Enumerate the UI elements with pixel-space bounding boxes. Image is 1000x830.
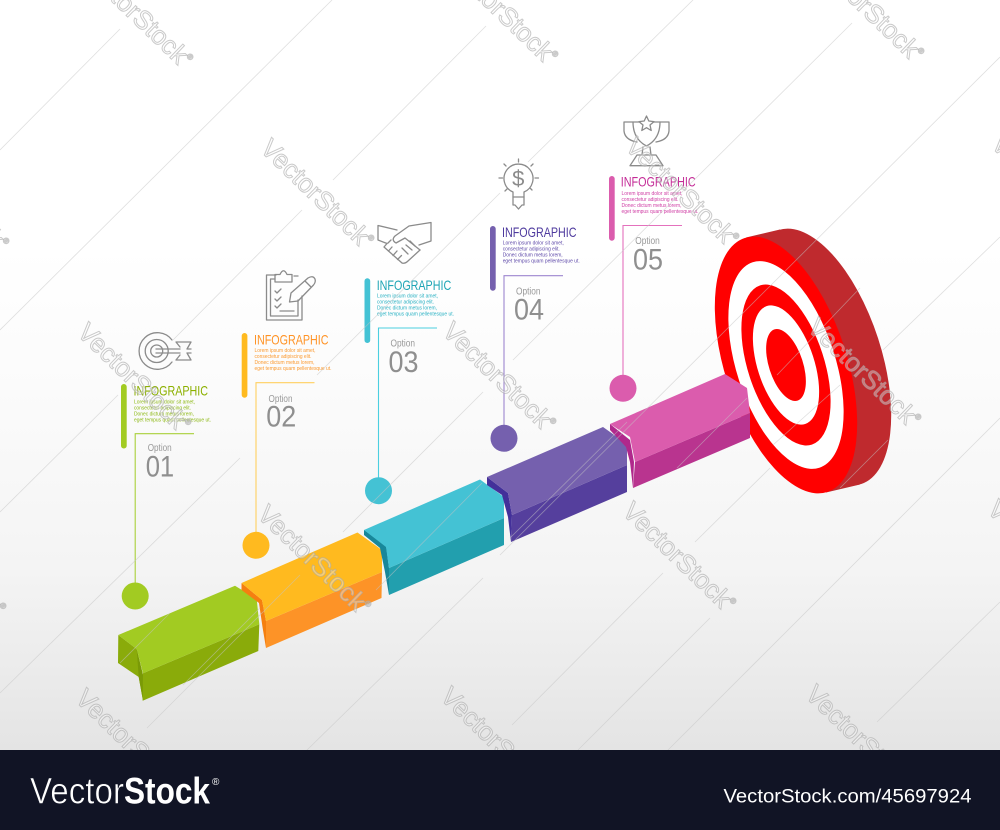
connector (135, 434, 194, 590)
heading: INFOGRAPHIC (502, 224, 576, 240)
number: 04 (514, 294, 544, 326)
text: ® (913, 412, 923, 422)
text: ® (183, 417, 193, 427)
heading: INFOGRAPHIC (377, 277, 451, 293)
icon: handshake (378, 222, 431, 263)
text: VectorStock (437, 316, 557, 434)
label: Option (268, 394, 292, 405)
label: Option (516, 286, 540, 298)
body text: Donec dictum metus lorem, (503, 252, 563, 258)
body text (377, 294, 454, 318)
footer logo: Vector (30, 770, 124, 812)
text: ® (916, 46, 926, 56)
body text: eget tempus quam pellentesque ut. (134, 417, 211, 423)
label: Option (148, 443, 172, 454)
connector (378, 328, 437, 485)
icon: trophy (624, 116, 669, 166)
footer url: VectorStock.com/45697924 (724, 787, 972, 808)
label: Option (635, 236, 660, 247)
connector (256, 383, 314, 540)
node (365, 477, 392, 504)
body text: consectetur adipiscing elit. (377, 300, 434, 306)
text: ® (731, 231, 741, 241)
body text: Donec dictum metus lorem, (377, 306, 437, 312)
segment 5 magenta (610, 374, 750, 488)
step 4 (490, 159, 580, 452)
footer logo (30, 770, 220, 812)
step 2 (242, 271, 332, 559)
node (242, 532, 270, 559)
body text (503, 240, 580, 264)
text: ® (1, 236, 11, 246)
body text (134, 399, 211, 423)
accent bar (242, 333, 247, 398)
text: ® (546, 781, 556, 791)
body text: consectetur adipiscing elit. (254, 354, 312, 360)
label: Option (390, 338, 415, 350)
body text: eget tempus quam pellentesque ut. (622, 209, 699, 215)
body text: Lorem ipsum dolor sit amet, (254, 348, 316, 354)
text: ® (185, 52, 195, 62)
text: VectorStock (72, 317, 192, 435)
accent bar (490, 226, 496, 291)
text: VectorStock (620, 131, 740, 249)
text: ® (363, 599, 373, 609)
body text: Donec dictum metus lorem, (622, 203, 682, 209)
text: VectorStock (255, 133, 375, 251)
heading: INFOGRAPHIC (134, 382, 208, 398)
segment 2 orange (242, 532, 382, 648)
step 5 (609, 116, 699, 402)
body text: Lorem ipsum dolor sit amet, (134, 399, 195, 405)
number: 03 (388, 346, 418, 379)
icon: light bulb with dollar (499, 159, 538, 209)
icon glyph: dollar: $ (512, 166, 524, 191)
target rim (721, 211, 919, 503)
body text: eget tempus quam pellentesque ut. (254, 366, 332, 372)
node (122, 582, 149, 610)
text: VectorStock (252, 499, 372, 617)
body text: Donec dictum metus lorem, (254, 360, 315, 366)
segment 3 teal (364, 480, 504, 595)
body text (622, 191, 699, 215)
step 3 (364, 222, 454, 504)
target (687, 211, 919, 511)
text: VectorStock (617, 496, 737, 614)
accent bar (364, 278, 370, 343)
body text: eget tempus quam pellentesque ut. (503, 258, 580, 264)
connector (623, 226, 682, 382)
accent bar (121, 384, 127, 448)
number: 02 (266, 401, 296, 434)
node (490, 425, 518, 452)
accent bar (609, 176, 615, 241)
heading: INFOGRAPHIC (254, 331, 328, 347)
target rings (687, 219, 885, 511)
body text: Lorem ipsum dolor sit amet, (503, 240, 564, 246)
body text: consectetur adipiscing elit. (622, 197, 679, 203)
body text: eget tempus quam pellentesque ut. (377, 312, 454, 318)
text: ® (366, 233, 376, 243)
heading: INFOGRAPHIC (621, 174, 696, 190)
footer bar (0, 750, 1000, 830)
node (610, 375, 636, 402)
text: ® (911, 779, 921, 789)
body text: Lorem ipsum dolor sit amet, (377, 294, 438, 300)
step 1 (121, 333, 211, 610)
body text: consectetur adipiscing elit. (134, 405, 191, 411)
text: VectorStock (802, 312, 922, 430)
icon: clipboard and pen (266, 271, 315, 320)
body text: consectetur adipiscing elit. (503, 246, 560, 252)
text: ® (728, 596, 738, 606)
text: VectorStock (800, 679, 920, 797)
text: ® (550, 49, 560, 59)
footer logo: ® (212, 777, 220, 788)
icon: target with arrow (139, 333, 191, 369)
segment 4 purple (487, 427, 627, 542)
footer logo: Stock (124, 770, 210, 812)
number: 05 (633, 244, 663, 276)
isometric path (118, 374, 750, 701)
text: VectorStock (70, 683, 190, 801)
body text: Donec dictum metus lorem, (134, 411, 194, 417)
segment 1 green (118, 586, 259, 701)
text: ® (181, 783, 191, 793)
text: ® (548, 416, 558, 426)
body text (254, 348, 332, 372)
connector (504, 276, 563, 432)
number: 01 (146, 451, 174, 484)
text: VectorStock (435, 681, 555, 799)
body text: Lorem ipsum dolor sit amet, (622, 191, 683, 197)
